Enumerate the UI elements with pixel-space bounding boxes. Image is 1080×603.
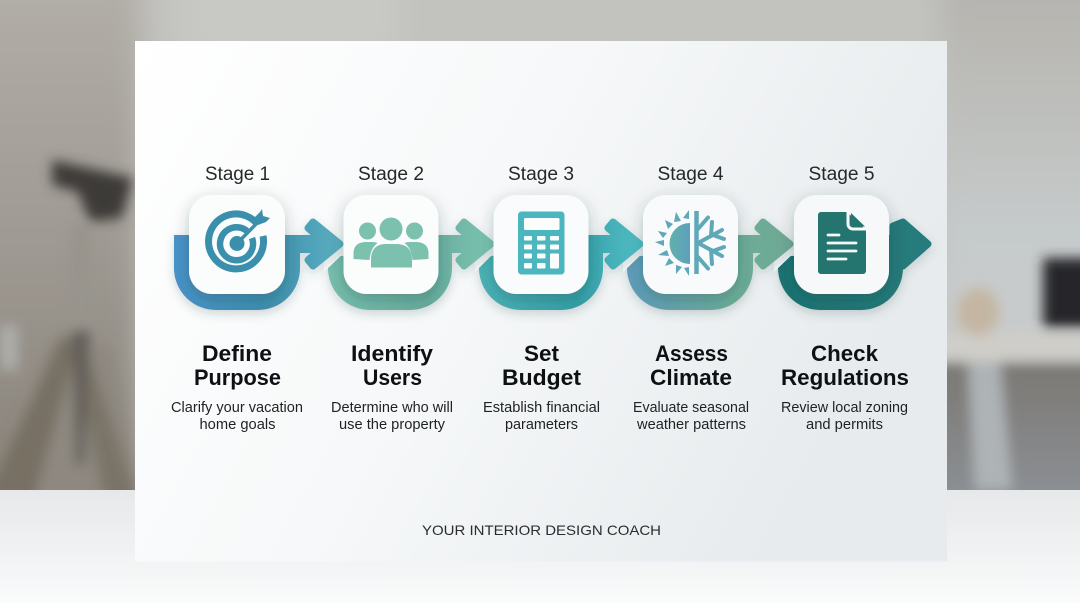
stage 4 label: Stage 4 [658,164,724,185]
heading: Assess Climate [650,341,732,390]
description: stage 1: Clarify your vacation [171,399,303,416]
footer brand line: YOUR INTERIOR DESIGN COACH [422,522,661,538]
description: stage 5: and permits [806,416,883,433]
description: stage 5 [781,399,908,433]
stage 2 flow connector [324,222,491,301]
heading: Check Regulations: Check [811,341,879,366]
heading: Set Budget: Set [524,341,560,366]
stage 1 tile [189,195,285,294]
description: stage 4 [633,399,749,433]
stage 2 tile [344,195,438,294]
stage 4 tile [643,195,738,294]
icon: group of people [354,218,428,268]
heading: Define Purpose: Purpose [194,365,281,390]
description: stage 4: weather patterns [636,416,746,433]
heading: Identify Users [351,341,434,390]
stage 3 label: Stage 3 [508,164,574,185]
stage 5 tile [794,195,889,294]
icon: document [818,211,867,274]
stage 2 label: Stage 2 [358,164,424,185]
description: stage 2: use the property [339,416,445,433]
stage 1 label: Stage 1 [205,164,270,185]
heading: Set Budget [502,341,582,390]
heading: Check Regulations: Regulations [781,365,909,390]
heading: Define Purpose [194,341,281,390]
description: stage 2: Determine who will [331,399,453,416]
description: stage 2 [331,399,453,433]
heading: Check Regulations [781,341,909,390]
description: stage 1 [171,399,303,433]
icon: target with arrow [209,209,270,269]
description: stage 1: home goals [200,416,276,433]
stage 1 flow connector [183,222,340,301]
stage 3 tile [494,195,588,294]
description: stage 3: parameters [505,416,578,433]
stage 5 label: Stage 5 [808,164,874,185]
description: stage 3 [483,399,600,433]
stage 4 flow connector [623,222,790,301]
description: stage 3: Establish financial [483,399,600,416]
description: stage 5: Review local zoning [781,399,908,416]
heading: Assess Climate: Climate [650,365,732,390]
heading: Set Budget: Budget [502,365,582,390]
icon: calculator [518,212,564,274]
heading: Define Purpose: Define [202,341,272,366]
icon: half sun half snowflake [655,210,724,276]
stage 3 flow connector [475,222,640,301]
heading: Identify Users: Identify [351,341,434,366]
description: stage 4: Evaluate seasonal [633,399,749,416]
stage 5 flow connector [774,222,928,301]
heading: Assess Climate: Assess [655,341,728,366]
heading: Identify Users: Users [363,365,422,390]
panel: white card [135,41,947,562]
